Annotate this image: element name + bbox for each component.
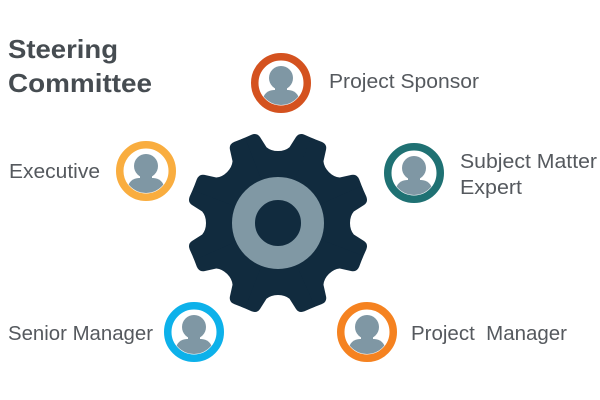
central gear xyxy=(189,134,367,312)
icon: senior manager xyxy=(168,306,220,359)
label: executive: Executive xyxy=(9,161,100,183)
icon: subject matter expert xyxy=(388,147,440,200)
label: subject matter expert xyxy=(460,151,597,199)
title xyxy=(8,34,152,98)
icon: project manager xyxy=(341,306,393,359)
label: senior manager: Senior Manager xyxy=(8,323,153,345)
icon: executive xyxy=(120,145,172,198)
icon: project sponsor xyxy=(255,57,307,110)
label: project sponsor: Project Sponsor xyxy=(329,71,479,93)
title: Steering xyxy=(8,34,118,64)
label: subject matter expert: Subject Matter xyxy=(460,151,597,173)
label: project manager: Project Manager xyxy=(411,323,567,345)
label: subject matter expert: Expert xyxy=(460,177,522,199)
title: Committee xyxy=(8,68,152,98)
